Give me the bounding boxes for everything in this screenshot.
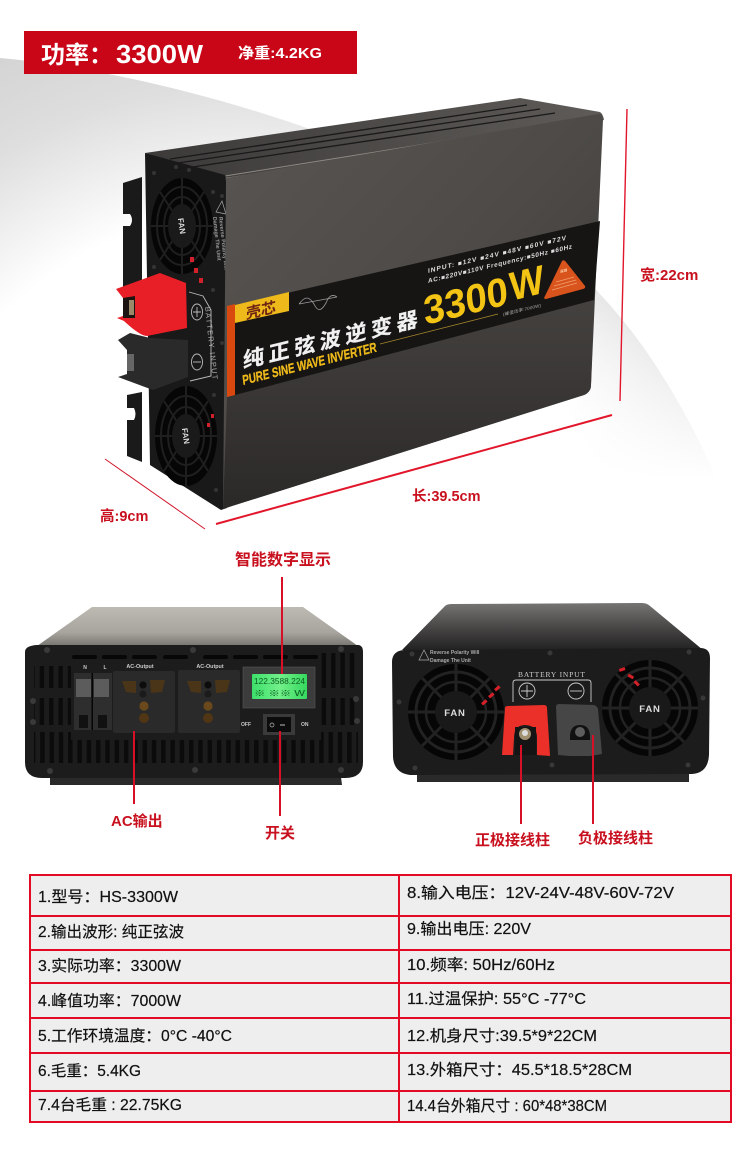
yellow logo — [235, 292, 289, 323]
spec 2: 2.输出波形: 纯正弦波 — [38, 923, 184, 941]
dimension line: width — [620, 109, 627, 401]
LCD display: 122.3588.224 — [254, 677, 305, 686]
rear panel body — [392, 648, 710, 775]
callout: display: 智能数字显示 — [235, 550, 331, 569]
inverter perspective photo — [116, 98, 604, 510]
AC top vents — [72, 655, 318, 659]
warning triangle — [216, 201, 226, 214]
red positive terminal — [116, 273, 187, 336]
spec 5: 5.工作环境温度：0°C -40°C — [38, 1026, 232, 1045]
LCD display: ※ ※※ W — [254, 689, 306, 698]
ON label: ON — [301, 722, 309, 728]
length label: 长:39.5cm — [412, 488, 481, 505]
right fan — [602, 660, 698, 756]
left fan — [408, 664, 504, 760]
callout: positive line — [520, 745, 522, 824]
warning text line two: Damage The Unit — [430, 658, 471, 664]
AC output label 1: AC-Output — [126, 664, 154, 670]
AC bottom vents — [34, 732, 358, 763]
product name chinese: 纯正弦波逆变器 — [243, 305, 422, 373]
AC output label 2: AC-Output — [196, 664, 224, 670]
callout: negative terminal: 负极接线柱 — [578, 829, 653, 847]
left fan: FAN — [444, 708, 466, 719]
black negative terminal — [118, 333, 188, 390]
front brushed face — [223, 114, 603, 509]
callout: AC output: AC输出 — [111, 812, 163, 830]
sine wave icon — [299, 295, 337, 310]
yellow logo: 壳芯 — [246, 299, 276, 323]
screws — [396, 650, 706, 770]
black terminal — [556, 704, 602, 756]
fan wires — [190, 257, 214, 427]
small label: (峰值功率:7000W) — [503, 302, 541, 318]
spec line two: AC:■220V■110V Frequency:■50Hz ■60Hz — [428, 243, 573, 285]
AC panel front view: L — [103, 665, 107, 671]
lower fan — [155, 386, 217, 486]
spec 1: 1.型号：HS-3300W — [38, 888, 178, 906]
callout: AC line — [133, 731, 135, 804]
spec line one: INPUT: ■12V ■24V ■48V ■60V ■72V — [428, 235, 567, 275]
battery symbols — [189, 292, 211, 381]
spec 6: 6.毛重：5.4KG — [38, 1062, 141, 1080]
wattage: 3300 — [421, 268, 510, 334]
battery input label: BATTERY INPUT — [203, 306, 220, 380]
orange strip — [227, 304, 235, 397]
screws — [30, 646, 360, 774]
spec 11: 11.过温保护: 55°C -77°C — [407, 990, 586, 1008]
orange warning triangle: 深圳 — [560, 267, 568, 274]
warning text: Reverse Polarity Will — [430, 650, 480, 656]
dimension line: length — [216, 415, 612, 524]
spec 12: 12.机身尺寸:39.5*9*22CM — [407, 1027, 597, 1045]
rear top cover — [402, 603, 703, 650]
battery input heading: BATTERY INPUT — [518, 670, 585, 679]
table lines — [30, 875, 731, 1122]
spec 4: 4.峰值功率：7000W — [38, 992, 181, 1010]
height label: 高:9cm — [100, 507, 148, 525]
specification table — [30, 875, 731, 1122]
right fan: FAN — [639, 704, 661, 715]
warning text: Reverse Polarity Will — [217, 217, 229, 271]
rear feet — [417, 773, 689, 782]
title banner — [24, 31, 357, 74]
LCD display — [243, 667, 315, 708]
red terminal — [502, 705, 550, 756]
spec 3: 3.实际功率：3300W — [38, 957, 181, 975]
callout: negative line — [592, 735, 594, 824]
upper fan — [151, 178, 213, 274]
AC panel front view — [25, 607, 363, 785]
product name english: PURE SINE WAVE INVERTER — [242, 340, 377, 388]
warning triangle — [419, 650, 429, 660]
upper fan: FAN — [176, 218, 187, 235]
breaker — [74, 673, 112, 730]
banner power label: 功率： — [41, 42, 113, 69]
OFF label: OFF — [241, 722, 251, 728]
orange warning triangle — [544, 260, 585, 299]
AC side vents — [34, 653, 358, 725]
AC top cover — [37, 607, 358, 646]
fan wires — [481, 667, 640, 705]
rear mounting brackets — [123, 177, 142, 462]
banner weight text: 净重:4.2KG — [238, 44, 322, 62]
spec 13: 13.外箱尺寸：45.5*18.5*28CM — [407, 1061, 632, 1079]
table background — [30, 875, 731, 1122]
battery symbols — [513, 680, 591, 702]
banner power value: 3300W — [116, 39, 203, 69]
spec 8: 8.输入电压：12V-24V-48V-60V-72V — [407, 884, 675, 902]
screws — [152, 165, 224, 492]
callout: positive terminal: 正极接线柱 — [475, 831, 550, 849]
dimension line: height — [105, 459, 205, 529]
socket 1 — [113, 671, 175, 733]
socket 2 — [178, 670, 240, 733]
rocker switch — [263, 714, 295, 735]
AC feet — [50, 777, 342, 785]
warning text line two: Damage The Unit — [211, 217, 222, 261]
lower front shade — [223, 300, 594, 509]
AC panel body — [25, 645, 363, 778]
background swoosh — [0, 58, 692, 428]
gold rule — [380, 314, 498, 344]
spec 9: 9.输出电压: 220V — [407, 920, 532, 938]
wattage unit: W — [507, 256, 546, 310]
callout: switch: 开关 — [265, 825, 295, 842]
callout: switch line — [279, 731, 281, 816]
callout: display line — [281, 577, 283, 674]
battery panel rear view — [392, 603, 710, 782]
width label: 宽:22cm — [640, 266, 698, 284]
black product label band — [227, 221, 600, 397]
spec 10: 10.频率: 50Hz/60Hz — [407, 956, 555, 974]
spec 14: 14.4台外箱尺寸 : 60*48*38CM — [407, 1097, 607, 1115]
top ribbed face — [145, 98, 604, 178]
lower fan: FAN — [180, 428, 191, 445]
side panel with fans — [145, 153, 229, 510]
N L labels: N — [83, 665, 87, 671]
spec 7: 7.4台毛重 : 22.75KG — [38, 1096, 182, 1114]
